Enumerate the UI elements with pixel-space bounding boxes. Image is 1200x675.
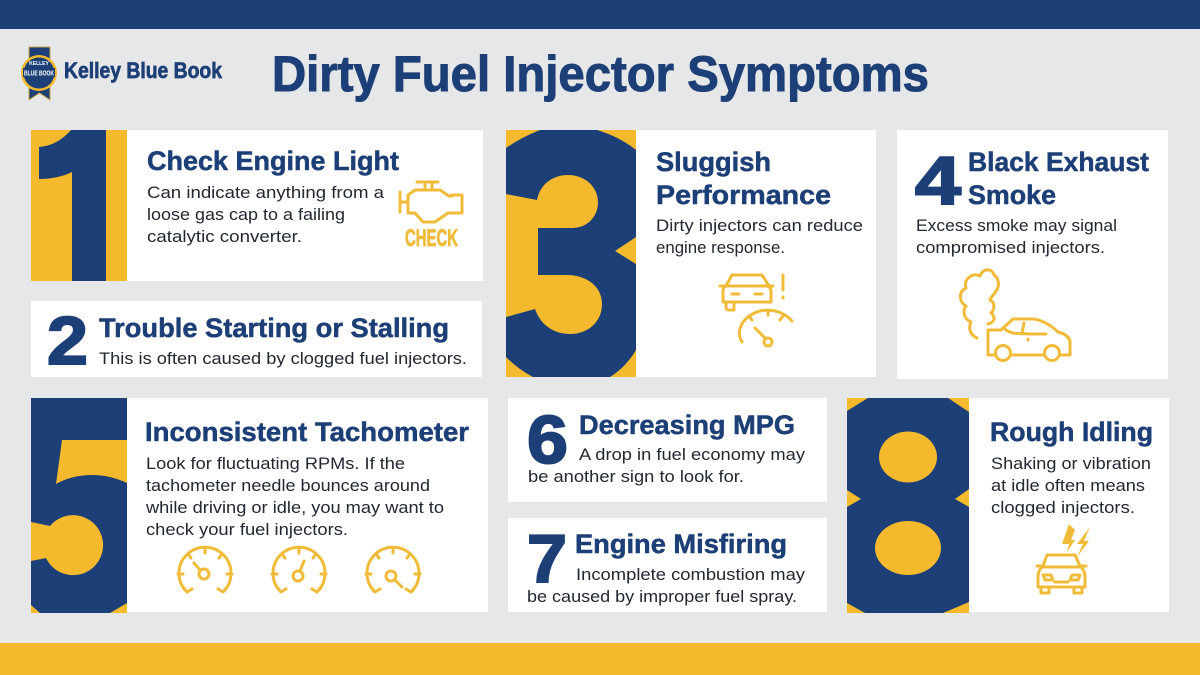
numeral 4: 4 bbox=[915, 143, 961, 219]
icon: car with lightning bbox=[1037, 524, 1090, 593]
body text: Excess smoke may signal bbox=[916, 217, 1117, 235]
body text bbox=[991, 455, 1151, 517]
numeral 1 bbox=[31, 130, 127, 281]
panel 5: inconsistent tachometer bbox=[31, 398, 488, 613]
title: Dirty Fuel Injector Symptoms bbox=[272, 46, 929, 102]
logo: Kelley Blue Book: BLUE BOOK bbox=[24, 68, 54, 78]
body text: loose gas cap to a failing bbox=[147, 206, 345, 224]
logo: Kelley Blue Book bbox=[21, 47, 223, 100]
body text: Dirty injectors can reduce bbox=[656, 217, 863, 235]
heading bbox=[656, 147, 831, 210]
panel 6: decreasing MPG bbox=[508, 398, 827, 502]
body text: while driving or idle, you may want to bbox=[145, 499, 444, 517]
heading: Rough Idling bbox=[990, 417, 1153, 447]
body text: tachometer needle bounces around bbox=[146, 477, 430, 495]
body text bbox=[527, 566, 806, 606]
heading: Black Exhaust bbox=[968, 147, 1149, 177]
numeral 5 bbox=[31, 398, 127, 613]
body text bbox=[656, 217, 863, 257]
heading: Inconsistent Tachometer bbox=[145, 417, 469, 447]
heading: Decreasing MPG bbox=[579, 410, 795, 440]
icon: check engine bbox=[400, 182, 462, 252]
body text: catalytic converter. bbox=[147, 228, 302, 246]
numeral 6: 6 bbox=[527, 402, 568, 478]
numeral 8 bbox=[847, 398, 969, 613]
body text bbox=[916, 217, 1117, 257]
body text: Shaking or vibration bbox=[991, 455, 1151, 473]
body text: be another sign to look for. bbox=[528, 468, 744, 486]
panel 3: sluggish performance bbox=[506, 130, 876, 377]
heading: Performance bbox=[656, 180, 831, 210]
panel 8: rough idling bbox=[847, 398, 1169, 613]
body text bbox=[145, 455, 444, 539]
body text: This is often caused by clogged fuel injectors. bbox=[99, 350, 467, 368]
heading: Smoke bbox=[968, 180, 1056, 210]
panel 1: check engine light bbox=[31, 130, 483, 281]
body text: Can indicate anything from a bbox=[147, 184, 385, 202]
panel 2: trouble starting bbox=[31, 301, 482, 379]
numeral 2: 2 bbox=[47, 303, 88, 379]
body text: be caused by improper fuel spray. bbox=[527, 588, 797, 606]
icon: smoking car bbox=[960, 270, 1070, 360]
bottom bar bbox=[0, 643, 1200, 675]
logo: Kelley Blue Book: KELLEY bbox=[29, 61, 50, 67]
body text: A drop in fuel economy may bbox=[579, 446, 806, 464]
body text: Look for fluctuating RPMs. If the bbox=[146, 455, 405, 473]
icon: car and gauge warning bbox=[720, 275, 792, 346]
body text bbox=[147, 184, 385, 246]
heading: Engine Misfiring bbox=[575, 529, 787, 559]
heading: Check Engine Light bbox=[147, 146, 399, 176]
icon: check engine: CHECK bbox=[405, 225, 458, 252]
heading bbox=[968, 147, 1149, 210]
body text: engine response. bbox=[656, 239, 785, 257]
body text: clogged injectors. bbox=[991, 499, 1135, 517]
body text: compromised injectors. bbox=[916, 239, 1105, 257]
body text bbox=[528, 446, 806, 486]
panel 4: black exhaust smoke bbox=[897, 130, 1168, 379]
logo: Kelley Blue Book: Kelley Blue Book bbox=[64, 58, 223, 83]
numeral 7: 7 bbox=[527, 521, 567, 597]
body text: check your fuel injectors. bbox=[146, 521, 348, 539]
numeral 3 bbox=[506, 130, 636, 377]
heading: Trouble Starting or Stalling bbox=[99, 313, 449, 343]
top bar bbox=[0, 0, 1200, 29]
body text: at idle often means bbox=[991, 477, 1145, 495]
heading: Sluggish bbox=[656, 147, 771, 177]
body text: Incomplete combustion may bbox=[576, 566, 806, 584]
panel 7: engine misfiring bbox=[508, 518, 827, 612]
icon: tachometer gauges bbox=[178, 547, 420, 592]
